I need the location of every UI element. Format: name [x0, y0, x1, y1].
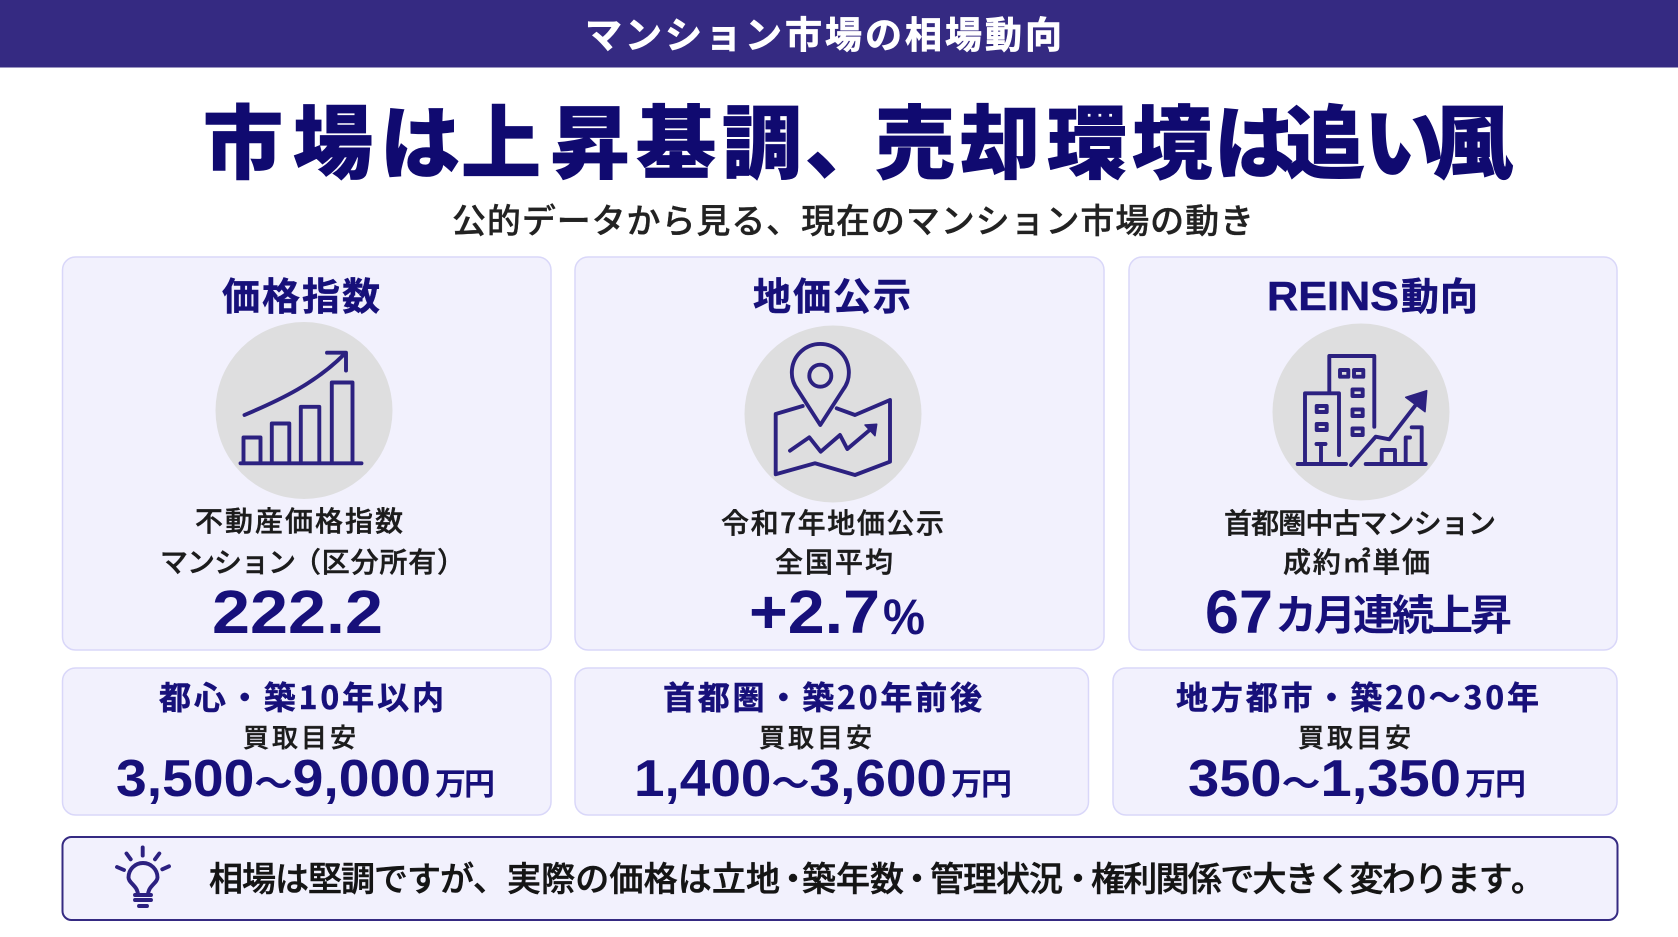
label: purchase estimate: 買取目安 — [1298, 718, 1411, 755]
segment heading: greater Tokyo: 首都圏・築20年前後 — [663, 673, 982, 719]
value: 67 months rising — [1205, 578, 1512, 646]
label: purchase estimate: 買取目安 — [243, 718, 356, 755]
callout text: ・ — [900, 852, 934, 901]
panel: central Tokyo purchase estimate — [62, 668, 551, 815]
icon: bar chart with rising arrow — [216, 322, 392, 499]
header band — [0, 0, 1678, 68]
callout text: 権利関係で大きく変わります。 — [1091, 852, 1545, 901]
callout text: 築年数 — [802, 852, 904, 901]
panel heading: REINS trend: 動向 — [1401, 266, 1478, 321]
description: price index: マンション — [160, 541, 296, 581]
panel: price index — [62, 257, 551, 650]
value: 3,500–9,000: 3,500～9,000 — [116, 750, 431, 808]
callout text: 相場は堅調ですが、 — [209, 852, 507, 901]
header band: マンション市場の相場動向 — [585, 5, 1062, 59]
description: land price: 全国平均 — [775, 541, 893, 581]
title: 市場は上昇基調、売却環境は追い風 — [203, 80, 1513, 196]
value: +2.7% — [749, 578, 925, 646]
callout text: 実際の価格は立地 — [507, 852, 780, 901]
panel heading: land price: 地価公示 — [753, 266, 911, 321]
panel: regional city purchase estimate — [1113, 668, 1617, 815]
segment heading: regional cities: 地方都市・築20～30年 — [1176, 673, 1539, 719]
description: price index — [160, 500, 465, 581]
value: 1,400–3,600: 1,400～3,600 — [634, 750, 947, 808]
icon: map with location pin — [744, 326, 922, 502]
label: purchase estimate: 買取目安 — [759, 718, 872, 755]
callout text: ・ — [776, 852, 810, 901]
callout text: 管理状況 — [930, 852, 1063, 901]
icon: light bulb — [117, 848, 169, 906]
description: REINS trend: 成約㎡単価 — [1283, 541, 1430, 581]
icon: buildings with rising arrow — [1272, 324, 1450, 500]
value: 350–1,350: 万円 — [1465, 759, 1526, 804]
description: land price: 令和7年地価公示 — [721, 502, 944, 542]
value: 67 months rising: 67 — [1205, 578, 1273, 646]
value: 3,500–9,000: 万円 — [435, 759, 495, 804]
callout text: ・ — [1061, 852, 1095, 901]
callout: note on price factors — [62, 837, 1618, 920]
description: REINS trend: 首都圏中古マンション — [1224, 502, 1496, 542]
callout text — [209, 852, 1545, 901]
value: 67 months rising: カ月連続上昇 — [1275, 582, 1512, 643]
description: price index: 不動産価格指数 — [195, 500, 403, 540]
panel: greater Tokyo purchase estimate — [575, 668, 1088, 815]
panel: REINS trend — [1129, 257, 1617, 650]
panel heading: price index: 価格指数 — [222, 266, 380, 321]
description: land price — [721, 502, 944, 581]
subtitle: 公的データから見る、現在のマンション市場の動き — [452, 194, 1254, 243]
value: 350–1,350: 350～1,350 — [1188, 750, 1461, 808]
panel heading: REINS trend — [1267, 266, 1478, 321]
description: price index: （区分所有） — [293, 541, 465, 581]
value: 1,400–3,600: 万円 — [951, 759, 1012, 804]
panel heading: REINS trend: REINS — [1267, 273, 1399, 319]
panel: land price — [575, 257, 1104, 650]
value: 222.2: 222.2 — [212, 578, 383, 646]
value: +2.7%: % — [883, 589, 925, 645]
description: REINS trend — [1224, 502, 1496, 581]
segment heading: central Tokyo: 都心・築10年以内 — [159, 673, 444, 719]
value: +2.7%: +2.7 — [749, 578, 880, 646]
